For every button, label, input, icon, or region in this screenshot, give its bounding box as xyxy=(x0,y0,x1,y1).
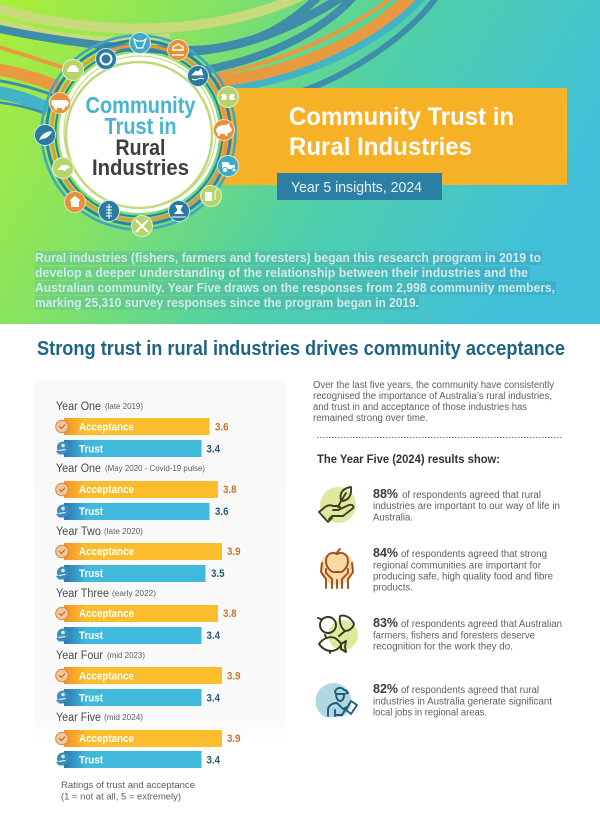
intro paragraph: marking 25,310 survey responses since the program began in 2019. xyxy=(35,295,419,310)
stat: 82 percent: industries in Australia generate significant xyxy=(373,696,552,708)
year three: Trust xyxy=(79,630,103,642)
icon: pig left xyxy=(50,92,70,114)
icon: fruit, leaf and fish xyxy=(318,616,358,653)
rating scale note: Ratings of trust and acceptance xyxy=(61,780,195,791)
icon: hands holding apple xyxy=(320,549,354,588)
stat: 84 percent xyxy=(320,545,553,594)
stat: 84 percent: producing safe, high quality food and fibre xyxy=(373,572,553,582)
stat: 83 percent: farmers, fishers and foresters deserve xyxy=(373,630,535,642)
year one 2020 pulse: 3.6 xyxy=(215,506,228,518)
year five: 3.9 xyxy=(227,733,240,745)
icon: hand holding leaf xyxy=(319,487,356,523)
year one 2019: Acceptance xyxy=(79,422,134,434)
main title: Rural Industries xyxy=(289,133,472,161)
rings xyxy=(42,36,236,230)
intro text right column: Over the last five years, the community have consistently xyxy=(313,380,554,391)
stat: 88 percent: industries are important to our way of life in xyxy=(373,501,560,512)
year one 2020 pulse: Acceptance xyxy=(79,484,134,496)
year five: Year Five xyxy=(56,712,101,724)
year five: (mid 2024) xyxy=(104,712,143,722)
logo badge xyxy=(34,32,238,236)
year one 2019: (late 2019) xyxy=(105,401,143,411)
title panel xyxy=(220,88,567,185)
logo wordmark: Trust in xyxy=(104,113,176,139)
intro text right column xyxy=(313,380,554,424)
icon: crop and water xyxy=(188,66,208,86)
year two: 3.5 xyxy=(211,568,224,580)
logo wordmark: Rural xyxy=(116,135,166,160)
rating scale note: (1 = not at all, 5 = extremely) xyxy=(61,792,181,802)
year three: Year Three xyxy=(56,588,109,600)
stat: 83 percent: 83% xyxy=(373,615,398,630)
main title: Community Trust in xyxy=(289,103,514,131)
icon: pig right xyxy=(214,120,234,140)
icon: spoon and fork xyxy=(132,216,152,236)
rating scale note xyxy=(61,780,195,802)
year one 2020 pulse: Trust xyxy=(79,506,103,518)
icon: forestry xyxy=(168,200,190,222)
icon: tractor xyxy=(218,156,238,176)
intro paragraph: Rural industries (fishers, farmers and foresters) began this research program in 2019 to xyxy=(35,250,541,265)
year one 2019: Year One xyxy=(56,401,101,413)
stat: 88 percent xyxy=(319,486,560,524)
year one 2019: 3.4 xyxy=(206,444,221,456)
stat: 84 percent: 84% xyxy=(373,545,398,560)
decorative ribbons xyxy=(0,0,438,113)
icon: worker with clipboard xyxy=(316,683,357,717)
subtitle tag xyxy=(277,173,442,200)
year three: 3.8 xyxy=(223,608,236,620)
main title xyxy=(289,103,514,161)
year five: 3.4 xyxy=(206,754,221,766)
stat: 84 percent: of respondents agreed that strong xyxy=(401,549,547,560)
year five: Acceptance xyxy=(79,733,134,745)
year three: (early 2022) xyxy=(112,588,156,598)
header background xyxy=(0,0,600,324)
year two xyxy=(56,526,241,582)
icon: fish xyxy=(34,124,56,146)
year four xyxy=(56,650,241,706)
logo wordmark: Community xyxy=(86,92,196,118)
year one 2020 pulse xyxy=(56,463,237,520)
year two: Year Two xyxy=(56,526,101,538)
stat: 83 percent: of respondents agreed that Australian xyxy=(401,619,562,630)
panel: trust and acceptance bar chart xyxy=(34,381,286,802)
logo wordmark xyxy=(86,92,196,180)
intro paragraph xyxy=(35,250,556,310)
stat: 82 percent: of respondents agreed that rural xyxy=(401,685,539,696)
stat: 83 percent xyxy=(318,615,562,653)
year one 2019: Trust xyxy=(79,444,103,456)
subtitle tag: Year 5 insights, 2024 xyxy=(291,179,422,196)
year five xyxy=(56,712,241,768)
year three: Acceptance xyxy=(79,608,134,620)
intro paragraph: Australian community. Year Five draws on the responses from 2,998 community members, xyxy=(35,280,555,295)
year five: Trust xyxy=(79,754,103,766)
year one 2019: 3.6 xyxy=(215,422,228,434)
icon: wheat xyxy=(98,200,120,222)
year one 2020 pulse: Year One xyxy=(56,463,101,475)
stat: 84 percent: products. xyxy=(373,582,413,594)
stat: 82 percent: local jobs in regional areas. xyxy=(373,708,487,718)
stat: 88 percent: 88% xyxy=(373,486,398,501)
stat: 88 percent: of respondents agreed that rural xyxy=(402,490,541,501)
year four: Acceptance xyxy=(79,670,134,682)
stat: 84 percent: regional communities are important for xyxy=(373,560,542,572)
icon: bird xyxy=(52,158,74,178)
year one 2020 pulse: 3.8 xyxy=(223,484,236,496)
year four: Year Four xyxy=(56,650,103,662)
icon: produce xyxy=(200,186,222,206)
year two: (late 2020) xyxy=(104,526,143,536)
year two: Acceptance xyxy=(79,546,134,558)
year one 2019 xyxy=(56,401,229,457)
year four: Trust xyxy=(79,692,103,704)
logo wordmark: Industries xyxy=(92,155,189,180)
year two: 3.9 xyxy=(227,546,240,558)
icon: tree xyxy=(62,60,84,80)
results heading: The Year Five (2024) results show: xyxy=(317,454,500,466)
icon: sheep xyxy=(96,48,116,70)
stat: 83 percent: recognition for the work they do. xyxy=(373,642,513,652)
year four: 3.4 xyxy=(206,692,221,704)
year two: Trust xyxy=(79,568,103,580)
intro text right column: remained strong over time. xyxy=(313,413,428,424)
section heading: Strong trust in rural industries drives community acceptance xyxy=(37,338,565,360)
year three xyxy=(56,588,237,644)
intro paragraph: develop a deeper understanding of the relationship between their industries and the xyxy=(35,265,528,280)
stat: 82 percent: 82% xyxy=(373,681,398,696)
stat: 88 percent: Australia. xyxy=(373,512,413,524)
year four: (mid 2023) xyxy=(107,650,145,660)
icon: cow xyxy=(130,32,150,54)
year one 2020 pulse: (May 2020 - Covid-19 pulse) xyxy=(105,463,205,473)
icon: beehive xyxy=(64,192,86,212)
icon: grains xyxy=(218,86,238,108)
stat: 82 percent xyxy=(316,681,552,718)
year three: 3.4 xyxy=(206,630,221,642)
icon: shearing shed xyxy=(168,40,188,60)
intro text right column: and trust in and acceptance of those industries has xyxy=(313,402,527,413)
year four: 3.9 xyxy=(227,670,240,682)
intro text right column: recognised the importance of Australia’s rural industries, xyxy=(313,391,552,402)
